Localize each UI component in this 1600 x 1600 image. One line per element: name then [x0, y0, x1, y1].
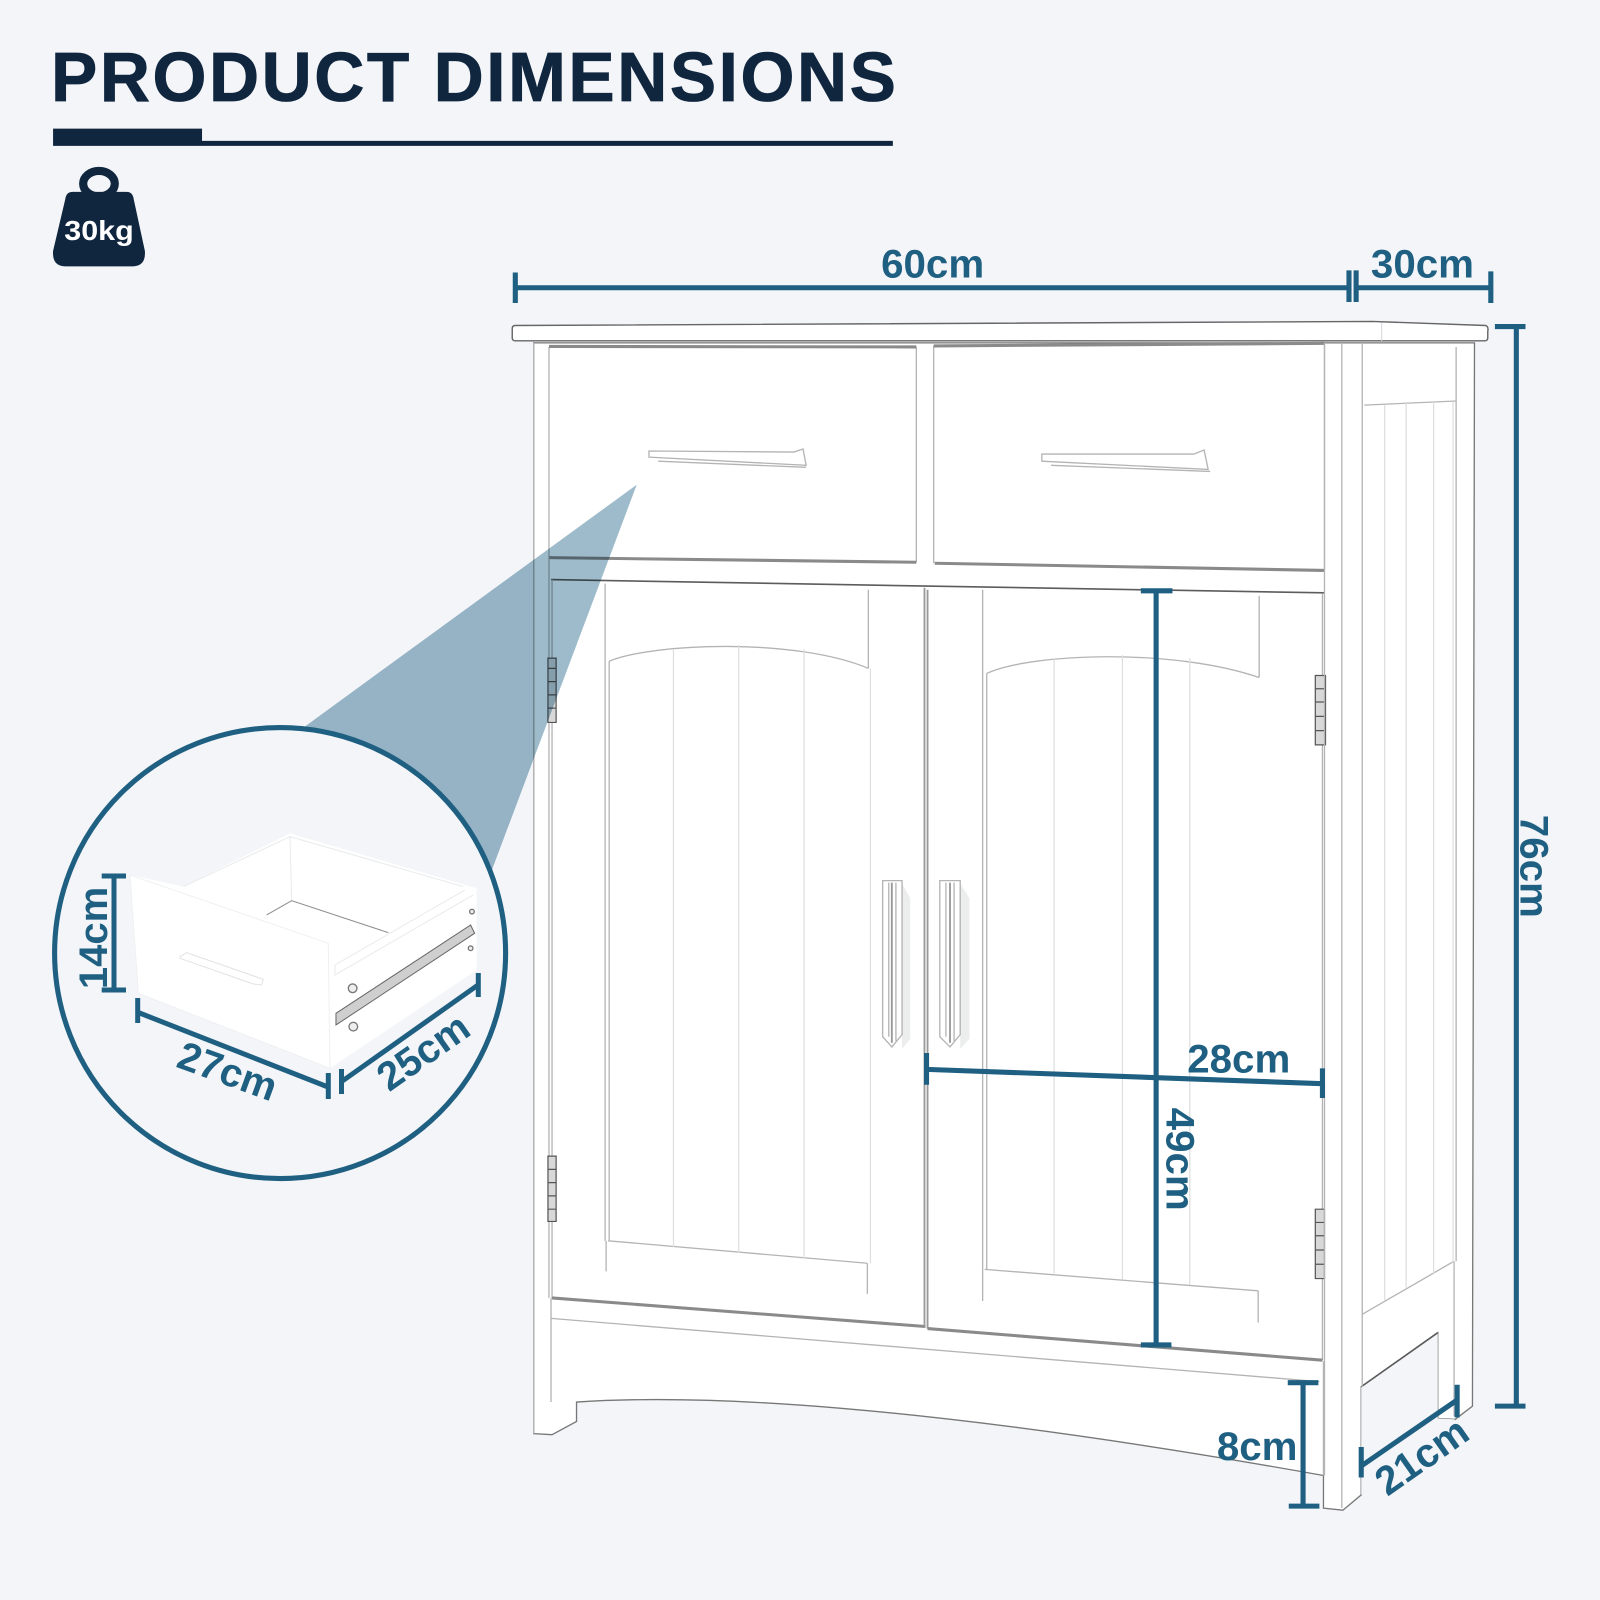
dimension: drawer width 27cm: 27cm — [172, 1034, 283, 1110]
dimension: drawer height 14cm: 14cm — [72, 887, 116, 989]
zoom wedge pointing to the drawer — [302, 485, 637, 876]
dimension: leg height 8cm — [1217, 1383, 1319, 1506]
drawer illustration — [130, 833, 477, 1068]
icon: weight capacity 30kg: 30kg — [64, 215, 134, 246]
dimension: drawer depth 25cm — [341, 973, 478, 1100]
dimension: leg depth 21cm: 21cm — [1367, 1408, 1477, 1504]
dimension: door height 49cm: 49cm — [1157, 1108, 1202, 1211]
hinges — [548, 658, 1326, 1279]
drawer handles — [649, 449, 1210, 471]
drawer fronts — [549, 343, 1324, 570]
side gap under cabinet — [1361, 1333, 1455, 1495]
right door — [928, 590, 1322, 1360]
dimension: leg height 8cm: 8cm — [1217, 1424, 1297, 1469]
right side panel — [1324, 343, 1456, 1508]
title: PRODUCT DIMENSIONS — [51, 38, 896, 116]
title underline — [53, 129, 893, 146]
top board — [512, 321, 1488, 341]
icon: weight capacity 30kg — [53, 171, 145, 266]
panel: drawer detail circle — [55, 728, 506, 1179]
right door handle — [940, 881, 969, 1049]
dimension: depth 30cm — [1356, 242, 1491, 303]
door centre gap — [924, 588, 928, 1329]
dimension: width 60cm: 60cm — [881, 242, 984, 287]
left door handle — [883, 881, 910, 1049]
dimension: drawer width 27cm — [137, 998, 328, 1110]
dimension: drawer depth 25cm: 25cm — [369, 1005, 478, 1100]
middle rail — [551, 580, 1324, 593]
base rail — [551, 1298, 1323, 1476]
cabinet illustration — [512, 321, 1488, 1510]
dimension: width 60cm — [515, 242, 1349, 303]
dimension: depth 30cm: 30cm — [1371, 242, 1474, 287]
cabinet body — [534, 343, 1474, 1510]
dimension: door width 28cm — [927, 1036, 1322, 1098]
dimension: door height 49cm — [1141, 591, 1202, 1345]
dimension: height 76cm — [1495, 327, 1556, 1406]
dimension: height 76cm: 76cm — [1511, 815, 1556, 918]
dimension: door width 28cm: 28cm — [1187, 1036, 1290, 1081]
left door — [552, 580, 926, 1327]
